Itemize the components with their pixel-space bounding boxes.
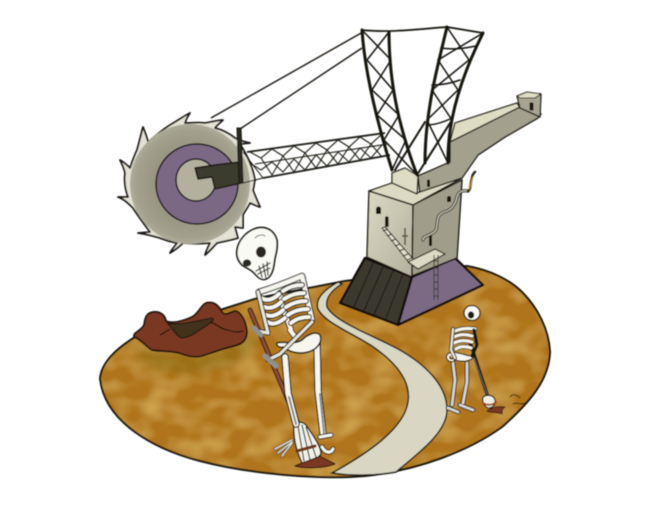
saw-toothed bucket wheel [118,113,260,255]
counterweight boom [418,92,541,194]
purple ring [156,144,238,224]
ribcage [259,276,312,338]
dirt mound with pit [134,303,247,357]
broom head [275,422,321,463]
ladder [434,255,438,300]
dirt squiggles [510,395,525,404]
small pelvis [447,352,475,362]
large skeleton with broom [237,228,335,468]
staircase and landing [382,227,445,269]
wheel hub [176,159,216,201]
small skull [464,306,480,320]
base left dark panel [340,258,412,325]
broom handle [250,310,298,424]
boom end cap [517,93,541,117]
ground: orange island [100,266,550,477]
dark wheel bracket [195,128,263,189]
skull [237,228,277,280]
wheel disc [130,124,250,244]
small arm [472,330,477,356]
tower block [367,168,462,277]
small ribcage and spine [451,328,475,358]
right lattice mast [395,27,483,175]
pelvis [277,333,321,353]
cabin [392,168,418,194]
windows [376,180,451,246]
winding road [317,282,447,475]
small broom head [483,395,495,408]
swept dirt pile [295,456,335,468]
small dirt pile [487,407,505,414]
small skeleton with broom [447,306,525,414]
lattice conveyor arm [247,133,390,178]
legs [285,343,333,452]
boom cables [211,32,363,129]
base right purple panel [398,258,483,325]
exterior pipe and crank [423,172,475,240]
mast top chord [362,27,483,33]
small legs [448,363,473,412]
small broom band [483,402,496,405]
base panel ribs [353,263,403,321]
small broom handle [470,342,487,394]
left lattice mast [362,30,417,175]
arms [254,292,312,366]
pit [167,318,213,338]
